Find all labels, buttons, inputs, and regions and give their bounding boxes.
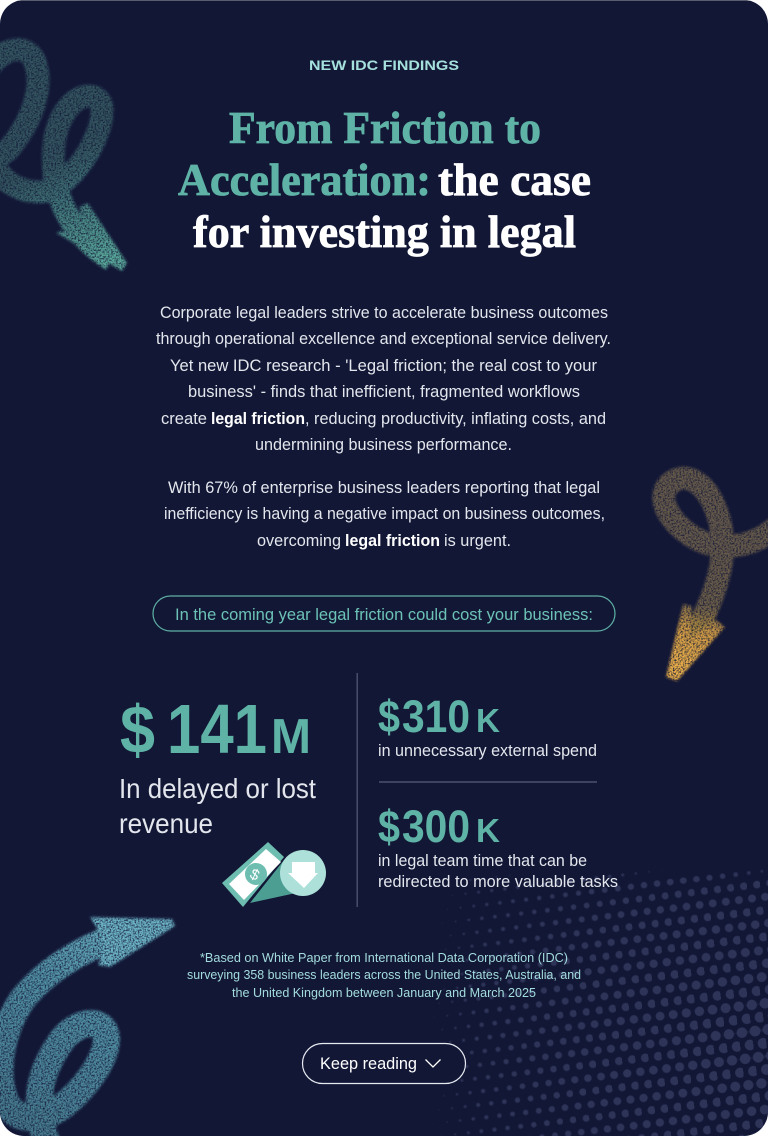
- stat: 300K: 300: [402, 801, 470, 852]
- second paragraph: overcoming: [257, 532, 341, 550]
- title: for investing in legal: [193, 206, 576, 257]
- stat: 300K: $: [378, 801, 400, 852]
- intro paragraph: business' - finds that inefficient, fragmented workflows: [188, 383, 580, 401]
- second paragraph: inefficiency is having a negative impact on business outcomes,: [164, 505, 605, 523]
- title: Acceleration:: [178, 154, 431, 205]
- intro paragraph: legal friction: [211, 410, 305, 428]
- second paragraph: [164, 479, 605, 550]
- icon: money with down arrow: $: [247, 866, 263, 885]
- intro paragraph: through operational excellence and exceptional service delivery.: [156, 330, 611, 348]
- footnote: *Based on White Paper from International Data Corporation (IDC): [200, 951, 568, 965]
- button: keep reading: [302, 1044, 466, 1084]
- stat: 310K: in unnecessary external spend: [378, 742, 597, 760]
- arrow: teal squiggle top left: [0, 50, 127, 271]
- second paragraph: legal friction: [345, 532, 440, 550]
- second paragraph: With 67% of enterprise business leaders reporting that legal: [168, 479, 600, 497]
- title: From Friction to: [229, 102, 541, 153]
- title: the case: [438, 154, 591, 205]
- stat: 141M: revenue: [119, 808, 213, 839]
- intro paragraph: Yet new IDC research - 'Legal friction; the real cost to your: [170, 357, 598, 375]
- stat: 141M: In delayed or lost: [119, 773, 316, 804]
- button: keep reading: Keep reading: [320, 1055, 417, 1073]
- intro paragraph: [156, 304, 611, 454]
- intro paragraph: , reducing productivity, inflating costs, and: [305, 410, 606, 428]
- second paragraph: is urgent.: [444, 532, 511, 550]
- eyebrow label: NEW IDC FINDINGS: [309, 57, 459, 73]
- callout pill: In the coming year legal friction could cost your business:: [175, 605, 593, 624]
- intro paragraph: undermining business performance.: [255, 436, 512, 454]
- intro paragraph: create: [161, 410, 207, 428]
- stat: 300K: [378, 801, 618, 891]
- stat: 141M: M: [271, 710, 311, 764]
- stat: 141M: 141: [167, 690, 267, 768]
- stat: 300K: in legal team time that can be: [378, 852, 587, 870]
- stat: 141M: [119, 690, 316, 839]
- arrow: blue squiggle bottom left: [0, 917, 175, 1136]
- stat: 310K: 310: [402, 691, 470, 742]
- arrow: gold squiggle right: [664, 478, 768, 681]
- footnote: surveying 358 business leaders across the United States, Australia, and: [187, 968, 581, 982]
- stat: 310K: [378, 691, 597, 760]
- callout pill: [153, 596, 615, 631]
- stat: 310K: K: [476, 702, 500, 739]
- stat: 141M: $: [120, 692, 155, 768]
- stat: 300K: redirected to more valuable tasks: [378, 873, 618, 891]
- icon: money with down arrow: [222, 842, 326, 907]
- divider: [356, 673, 358, 907]
- halftone dot pattern: [434, 870, 768, 1136]
- stat: 300K: K: [476, 812, 500, 849]
- stat: 310K: $: [378, 691, 400, 742]
- intro paragraph: Corporate legal leaders strive to accelerate business outcomes: [160, 304, 608, 322]
- footnote: [187, 951, 581, 1000]
- footnote: the United Kingdom between January and March 2025: [232, 986, 536, 1000]
- title: [178, 102, 591, 257]
